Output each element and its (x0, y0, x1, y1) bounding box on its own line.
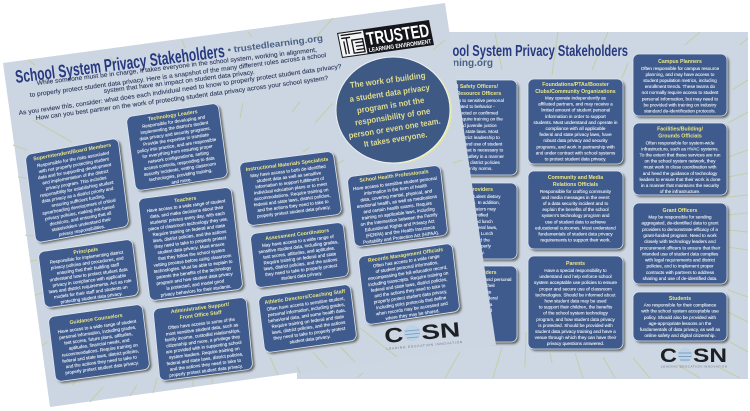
card: parents: student data privacy training and have a (535, 329, 616, 334)
card: parents: privacy questions answered. (547, 341, 604, 346)
card: safety officers: Have access to sensitive personal (435, 98, 504, 103)
card: technology providers: May have access to student and personal (428, 277, 511, 282)
card: records management officials: where they may be shared. (385, 308, 440, 321)
card: facilities: Often responsible for system-wide (646, 140, 715, 145)
card: instructional materials specialists: properly protect student data privacy. (257, 205, 331, 219)
card: superintendent / board members: and implementation of the district (42, 168, 109, 186)
card: school health professionals (347, 165, 450, 249)
card: athletic directors: laws, district policies, and the actions (272, 320, 346, 335)
panel: front page (3, 3, 496, 407)
card: technology providers: privacy programs, and (447, 308, 492, 313)
card: community and media relations: of a data security incident and to (543, 201, 609, 206)
logo: CoSN back page: SN (693, 345, 727, 367)
card: superintendent / board members: privacy responsibilities. (59, 224, 105, 237)
card: records management officials (358, 243, 462, 327)
card: athletic directors: student data privacy. (289, 334, 331, 345)
card: community and media relations: explain the benefits of the school (542, 207, 609, 212)
card: administrative support: most sensitive student data, such as (166, 322, 239, 337)
card: campus planners: personal information, but may need to (642, 96, 719, 101)
card: safety officers: data only for what is necessary to (436, 148, 504, 153)
card: school health professionals: Educational Rights and Privacy Act (365, 218, 436, 232)
card: safety officers: get access to and use of student (437, 141, 503, 146)
card: instructional materials specialists: Instructional Materials Specialists (245, 157, 329, 173)
card: instructional materials specialists: student data as well as sensitive (256, 170, 322, 183)
card: campus planners: Campus Planners (658, 59, 702, 65)
card: nutrition providers: data based on federal laws, (442, 225, 497, 230)
card: nutrition providers: Nutrition Providers (446, 187, 493, 193)
card: campus planners: enrollment trends. These teams do (645, 84, 716, 89)
callout: quote circle: program is not the (356, 95, 425, 115)
card: parents: Have a special responsibility to (544, 268, 607, 273)
card: instructional materials specialists: May have access to both de-identified (250, 164, 326, 178)
card: parents: of the school system technology (543, 311, 609, 316)
card: technology leaders (126, 103, 230, 193)
card: nutrition providers: National Student Lunch (446, 231, 494, 236)
card: facilities: To the extent that these services are run (640, 152, 721, 158)
card: principals: privacy policies and procedures, and (50, 255, 124, 271)
logo: CoSN back page: C (660, 345, 677, 367)
card: facilities: Facilities/Building/ (657, 126, 703, 132)
card: grant officers: policies, and to implement proper (647, 264, 714, 269)
card: guidance counselors: properly protect student data privacy. (65, 360, 139, 375)
card: superintendent / board members: stakeholders understand their (51, 217, 112, 232)
card: parents: how student data may be used (545, 298, 607, 303)
card: safety officers: both suspected or confirmed (441, 110, 499, 115)
card: guidance counselors: Guidance Counselors (69, 313, 123, 326)
card: assessment coordinators: laws, district policies, and the actions (263, 257, 338, 271)
card: principals: Responsible for implementing district (49, 250, 124, 265)
card: nutrition providers: protect privacy. (454, 250, 485, 255)
callout: quote circle: responsibility of one (354, 106, 431, 127)
card: superintendent / board members: privacy program. This includes (45, 175, 108, 191)
card: teachers: is protected, and model good (166, 278, 225, 291)
card: community and media relations (528, 171, 625, 251)
card: students: policy. Should also be provided with (644, 315, 716, 320)
card: assessment coordinators: student data privacy. (281, 271, 323, 281)
card: school health professionals: and certain health exams. Require (363, 201, 433, 214)
callout: quote circle: a student data privacy (349, 82, 431, 104)
card: superintendent / board members: privacy policies, making risk-based (45, 204, 115, 221)
card: safety officers: incidents. Require training on the (436, 117, 503, 122)
card: foundations: compliance with all applicable (546, 126, 606, 131)
card: community and media relations: Responsible for crafting community (540, 189, 612, 194)
logo: Trusted Learning Environment: TRUSTED (365, 20, 431, 49)
card: administrative support: Often have access to some of the (168, 317, 236, 330)
website: • trustedlearning.org (227, 33, 323, 55)
card: athletic directors: Require training on federal and state (271, 314, 345, 329)
card: superintendent / board members (25, 138, 131, 245)
card: grant officers: contracts with partners to address (646, 270, 715, 275)
card: parents: Parents (566, 261, 585, 267)
card: assessment coordinators: Assessment Coordinators (265, 228, 330, 242)
card: athletic directors: they need to take to properly protect (273, 326, 346, 341)
logo: CoSN back page (660, 345, 727, 368)
card: administrative support: Administrative Support/ (171, 302, 230, 315)
back page website: trustedlearning.org (401, 58, 493, 69)
card: safety officers: FERPA and juvenile justice (442, 123, 497, 128)
card: facilities: and heed the guidance of technology (643, 171, 718, 176)
card: administrative support: citizenship and more, a privilege they (166, 334, 241, 348)
card: assessment coordinators (250, 222, 351, 290)
card: school health professionals: information in the form of health (364, 183, 428, 196)
card: grant officers: May be responsible for sending (648, 214, 712, 220)
card: parents: is protected. Should be provided with (538, 323, 613, 328)
card: technology leaders: Technology Leaders (148, 109, 198, 123)
card: community and media relations: use of student data to achieve (545, 219, 606, 224)
card: campus planners: be provided with training on industry (644, 102, 717, 107)
card: parents: proper and secure use of classroom (539, 286, 612, 291)
logo: CoSN front page: SN (420, 318, 461, 345)
card: instructional materials specialists (239, 151, 344, 228)
card: teachers (138, 187, 245, 303)
card: administrative support: system leaders. Require training on (169, 346, 240, 360)
card: safety officers: FERPA and state laws. Most (441, 129, 499, 134)
card: technology providers: data as they provide their (444, 283, 496, 288)
card: records management officials: Records Management Officials (368, 247, 444, 264)
card: school health professionals: Portability and Protection Act (HIPAA). (363, 230, 439, 245)
card: records management officials: including transcripts. Require training on (368, 270, 449, 287)
card: grant officers: with legal requirements and district (645, 258, 716, 263)
card: safety officers: consistent with district policies (439, 160, 501, 165)
back page title: School System Privacy Stakeholders (432, 43, 628, 60)
card: principals: laws and district requirements. Act as role (48, 278, 132, 294)
card: community and media relations: Relations Officials (553, 182, 598, 188)
card: principals: understand how to protect student data (49, 267, 128, 282)
card: principals: protecting student data privacy. (60, 291, 123, 305)
card: guidance counselors: recommendations. Require training on (62, 342, 139, 358)
card: school health professionals: on the intersection between the Family (360, 212, 438, 227)
card: grant officers: grant-funded program. Need to work (643, 233, 717, 238)
card: grant officers: Grant Officers (663, 208, 698, 214)
card: safety officers (422, 80, 519, 177)
logo: Trusted Learning Environment (337, 20, 434, 58)
card: foundations: affiliated partners, and may receive a (538, 102, 613, 107)
card: teachers: piece of classroom technology they use. (148, 216, 228, 232)
card: athletic directors: personal information, including grades, (268, 302, 345, 318)
card: athletic directors (258, 284, 359, 355)
card: records management officials: and the actions they need to take to (374, 283, 446, 299)
callout: quote circle (336, 57, 452, 164)
card: grant officers: intended use of student data complies (642, 251, 719, 256)
card: nutrition providers: school administrators may (443, 206, 497, 211)
card: campus planners: Often responsible for campus resource (641, 66, 720, 71)
card: nutrition providers (422, 183, 519, 261)
card: teachers: student data privacy. Must ensure (157, 241, 225, 255)
card: teachers: laws, district policies, and the actions (153, 229, 227, 243)
card: school health professionals: Have access to sensitive student personal (353, 176, 437, 191)
card: safety officers: data related to behavior - (444, 104, 495, 109)
card: instructional materials specialists: accommodations. Require training on (254, 187, 329, 202)
card: facilities: infrastructure, such as HVAC systems. (641, 146, 719, 151)
card: foundations: to protect student data privacy. (545, 156, 606, 161)
card: assessment coordinators: Require training on federal and state (263, 251, 337, 266)
card: grant officers (633, 203, 729, 286)
card: administrative support: and the actions they need to take to (170, 358, 242, 372)
card: teachers: parents the benefits of the technology (156, 265, 232, 280)
card: assessment coordinators: test scores, attitudes, and aptitudes. (263, 245, 335, 260)
card: community and media relations: system's technology program and (542, 213, 610, 218)
card: technology leaders: network configurations, setting (148, 150, 209, 164)
card: community and media relations: requirements to support their work. (540, 238, 611, 243)
logo: Trusted Learning Environment: LEARNING ENVIRONMENT (368, 39, 432, 54)
callout: quote circle: The work of building (349, 70, 426, 90)
card: assessment coordinators: May have access to a wide range of (262, 234, 335, 248)
card: records management officials: when records may be accessed and (376, 301, 449, 316)
intro text: As you review this, consider: what does each individual need to know to properly protect student data privacy? (18, 63, 343, 117)
card: nutrition providers: free and reduced lunch (446, 219, 493, 224)
panel: back page (297, 32, 748, 379)
card: students: fundamentals of data privacy, as well as (640, 327, 721, 332)
card: foundations: information in order to support (545, 114, 607, 119)
intro text: How can you best partner on the work of protecting student data privacy across your school system? (35, 75, 329, 122)
card: technology providers: directed by district (451, 320, 489, 325)
card: parents: venue through which they can have their (535, 335, 617, 340)
card: teachers: Have access to a wide range of student (146, 198, 226, 213)
card: teachers: Teachers (174, 195, 197, 204)
card: students (633, 292, 729, 343)
card: teachers: privacy behaviors for their students. (160, 284, 232, 298)
card: teachers: students' privacy every day, with each (150, 211, 226, 225)
card: grant officers: closely with technology leaders and (644, 239, 716, 244)
card: administrative support (153, 297, 255, 383)
card: school health professionals: emotional health, as well as medications (357, 194, 438, 209)
card: foundations (528, 79, 625, 166)
card: guidance counselors: aptitudes, financial needs, and (69, 337, 130, 351)
card: technology providers: laws, have robust data (447, 302, 493, 307)
card: foundations: programs, and work in partnership with (536, 144, 615, 149)
card: superintendent / board members: responsibility for establishing student (40, 180, 115, 198)
card: assessment coordinators: sensitive student data, including grades, (258, 239, 339, 254)
card: technology leaders: security incidents, vetting classroom (144, 161, 216, 177)
card: safety officers: School Resource Officers (438, 91, 501, 97)
logo: CoSN front page: LEADING EDUCATION INNOVATION (386, 340, 463, 351)
card: principals: ensuring that their building staff (56, 262, 120, 276)
card: community and media relations: educational outcomes. Must understand (535, 225, 616, 230)
card: assessment coordinators: they need to take to properly protect (265, 263, 338, 277)
card: school health professionals: (FERPA) and the Health Insurance (366, 224, 436, 238)
card: students: online safety and digital citizenship. (644, 333, 716, 338)
card: students: Are responsible for their compliance (644, 303, 717, 308)
intro text: system that have an impact on student data privacy. (103, 69, 255, 95)
card: technology leaders: implementing the district's student (140, 120, 209, 135)
card: campus planners: planning, and may have access to (646, 72, 715, 77)
card: nutrition providers: Have access to student dietary (438, 194, 501, 199)
card: facilities: must work in close coordination with (644, 165, 717, 170)
card: students: Students (669, 296, 691, 302)
card: records management officials: of student personal information, (375, 260, 439, 274)
card: facilities: on the school system network, they (644, 159, 716, 164)
card: school health professionals: training on applicable laws, including (362, 206, 436, 221)
card: foundations: robust data privacy and security (543, 138, 608, 143)
card: superintendent / board members: with not properly protecting student (39, 156, 110, 174)
logo: CoSN front page (383, 318, 463, 351)
card: parents: to support their children, the benefits (539, 305, 613, 310)
card: instructional materials specialists: information to support fulfillment of (255, 176, 325, 190)
callout: quote circle: It takes everyone. (363, 129, 428, 149)
card: administrative support: are provided with in supporting school (166, 340, 242, 354)
card: teachers: program and how student data privacy (156, 271, 234, 286)
card: records management officials: Often has access to a wide range (373, 254, 440, 268)
card: technology leaders: Provide the expertise to translate (143, 132, 210, 147)
card: teachers: that they follow the school system (158, 247, 226, 261)
card: foundations: limited amount of student personal (541, 108, 610, 113)
card: grant officers: procurement officers to ensure that their (640, 245, 721, 250)
card: records management officials: including strict protocols that define (376, 295, 447, 310)
card: guidance counselors: personal information, including grades, (59, 325, 136, 340)
card: parents: technologies. Should be informed about (535, 292, 616, 297)
card: instructional materials specialists: federal and state laws, district policies, (254, 193, 331, 207)
card: records management officials: properly protect student data privacy, (373, 289, 447, 305)
card: superintendent / board members: data privacy as a district priority and (41, 186, 114, 204)
card: technology providers: systems. Must abide federal (441, 296, 498, 301)
card: superintendent / board members: Responsible for the risks associated (37, 150, 110, 168)
card: superintendent / board members: Superintendent/Board Members (33, 142, 112, 163)
card: guidance counselors: and the actions they need to take to (65, 354, 138, 369)
card: grant officers: sharing and use of de-identified data. (643, 276, 717, 281)
card: administrative support: properly protect student data privacy. (169, 363, 243, 378)
card: technology providers: Technology Providers (442, 270, 497, 276)
card: technology providers: solutions and operate (448, 289, 492, 294)
card: campus planners: standard de-identification protocols. (644, 108, 716, 113)
card: grant officers: providers to demonstrate efficacy of a (642, 227, 718, 232)
card: teachers: data, and make decisions about their (150, 205, 224, 219)
title: School System Privacy Stakeholders (14, 41, 226, 87)
card: facilities: of the infrastructure. (660, 189, 700, 194)
card: athletic directors: Athletic Directors/Coaching Staff (264, 289, 346, 306)
card: nutrition providers: they need to properly (448, 244, 492, 249)
card: campus planners: student population metrics, including (643, 78, 717, 83)
card: administrative support: family income, custodial relationships, (165, 328, 241, 343)
card: principals: Principals (73, 247, 98, 256)
card: technology leaders: access controls, responding to data (144, 155, 215, 171)
card: foundations: May operate independently as (545, 96, 607, 100)
card: safety officers: School Safety Officers/ (441, 84, 498, 90)
card: students: with the school system acceptable use (641, 309, 719, 314)
card: technology leaders: data privacy and security programs. (139, 126, 211, 141)
card: campus planners (633, 54, 729, 118)
card: technology leaders: for everything from ensuring proper (142, 143, 213, 159)
card: campus planners: not normally require access to student (642, 90, 719, 95)
card: records management officials: federal and state laws, district policies, (371, 277, 448, 293)
card: foundations: federal and state privacy laws, have (539, 132, 612, 137)
card: superintendent / board members: ensuring sufficient funding, (51, 193, 105, 208)
logo: CoSN front page: C (383, 323, 405, 348)
card: administrative support: Front Office Staff (179, 310, 222, 321)
card: superintendent / board members: data and for supporting development (38, 162, 112, 180)
card: foundations: students. Must understand and operate in (534, 120, 618, 125)
card: parents (528, 256, 625, 351)
card: principals: privacy in compliance with applicable (52, 273, 127, 288)
card: facilities: in a manner that maintains the security (641, 183, 720, 188)
card: athletic directors: behavioral data, and some health data. (268, 308, 346, 324)
card: nutrition providers: need, de-identified (451, 213, 489, 218)
card: guidance counselors (48, 304, 152, 384)
card: technology providers: when contracted, as (449, 314, 491, 319)
card: foundations: Foundations/PTAs/Booster (542, 82, 609, 88)
card: nutrition providers: Act policies, and the (449, 237, 490, 242)
card: parents: program, and how student data privacy (536, 317, 616, 322)
card: facilities: Grounds Officials (658, 134, 702, 140)
card: superintendent / board members: decisions, and ensuring that all (49, 210, 112, 227)
card: grant officers: aggregated, de-identified data to grant (641, 221, 719, 226)
card: safety officers: work with district leadership to (439, 135, 500, 140)
card: athletic directors: Often have access to sensitive student, (266, 296, 345, 312)
card: technology leaders: technologies, providing training, (149, 168, 213, 182)
card: guidance counselors: federal and state laws, district policies, (62, 348, 139, 364)
card: nutrition providers: and health factors. In addition, (439, 200, 500, 205)
card: foundations: Clubs/Community Organizations (535, 89, 616, 95)
card: superintendent / board members: spearheading development of critical (42, 198, 116, 216)
card: principals (38, 239, 141, 310)
card: teachers: technologies. Must be able to explain to (154, 259, 233, 274)
callout: quote circle: person or even one team. (348, 116, 441, 140)
card: school health professionals: School Health Professionals (359, 169, 429, 184)
card: students: age-appropriate lessons on the (649, 321, 712, 326)
card: instructional materials specialists: individual education plans or to meet (254, 181, 328, 196)
intro text: to properly protect student data privacy. Here is a snapshot of the many different roles across a school (29, 52, 327, 99)
card: technology providers: student data. (456, 333, 483, 338)
card: parents: system acceptable use policies to ensure (534, 280, 617, 285)
intro text: While someone must be in charge, it takes everyone in the school system, working in alignment, (36, 47, 318, 87)
card: administrative support: federal and state laws, district policies, (166, 351, 243, 366)
intro text (18, 47, 343, 122)
card: parents: understand and help enforce school (539, 274, 612, 279)
card: school health professionals: data, covering mental, physical, and (360, 188, 433, 203)
logo: CoSN back page: LEADING EDUCATION INNOVATION (661, 364, 727, 368)
card: instructional materials specialists: and the actions they need to take to (257, 199, 329, 213)
card: safety officers: and community norms. (446, 166, 492, 171)
card: community and media relations: Community and Media (548, 175, 603, 181)
card: guidance counselors: test scores, future plans, attitudes, (64, 331, 133, 346)
card: foundations: and under contract with school systems (536, 150, 616, 155)
card: teachers: vetting process before using classroom (153, 253, 232, 268)
card: community and media relations: and media messages in the event (542, 195, 610, 200)
card: teachers: they need to take to properly protect (154, 235, 227, 249)
card: technology leaders: and more. (171, 177, 192, 185)
card: community and media relations: fundamentals of student data privacy (538, 231, 613, 236)
card: technology leaders: Responsible for developing and (142, 114, 206, 129)
card: records management officials: encompassing the full education record, (368, 265, 448, 281)
card: facilities (633, 123, 729, 197)
card: safety officers: ensure student safety in a manner (435, 154, 504, 159)
card: facilities: leaders to ensure that their work is done (640, 177, 721, 182)
card: technology leaders: policy into practice, and are responsible (137, 137, 217, 154)
card: principals: models for their staff and students on (54, 284, 128, 300)
card: teachers: Require training on federal and state (152, 223, 226, 237)
card: guidance counselors: Have access to a wide range of student (57, 318, 137, 334)
card: technology providers: leaders, to protect (451, 327, 488, 332)
card: technology providers (422, 266, 519, 344)
